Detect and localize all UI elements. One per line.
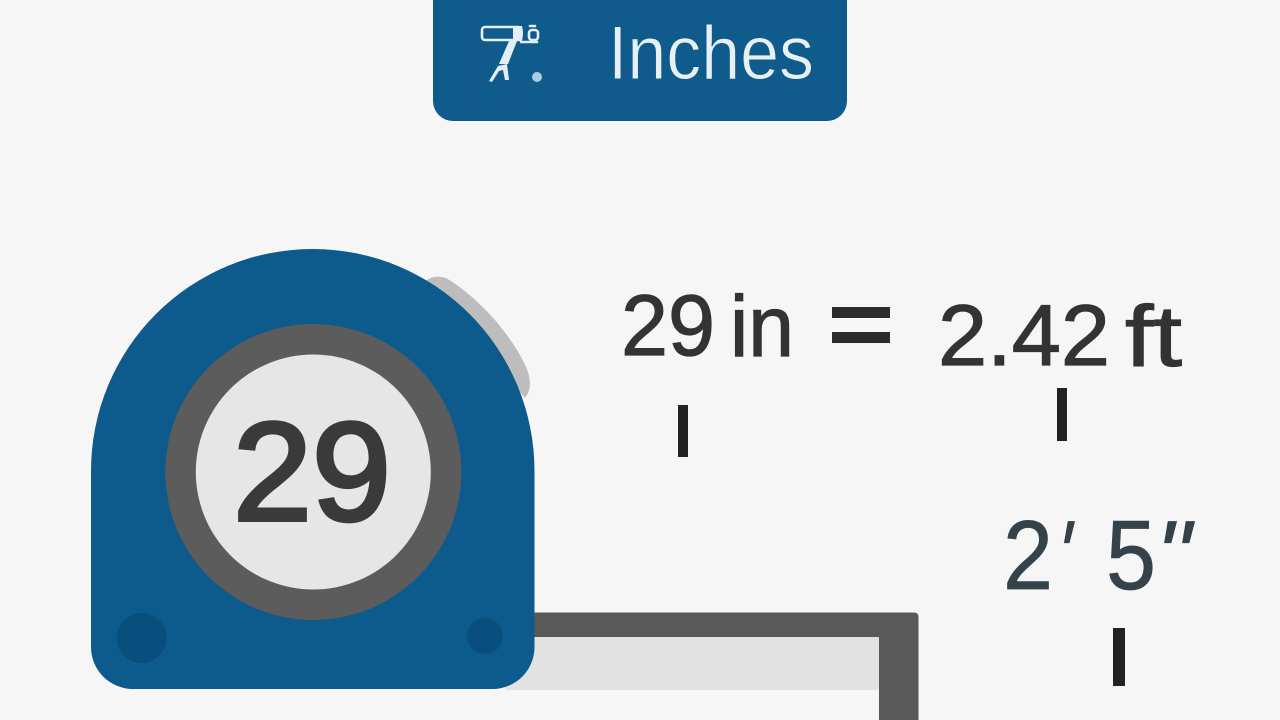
feet value: 2.42 bbox=[938, 288, 1110, 384]
tick under inches bbox=[678, 405, 688, 457]
inches value: 29 bbox=[621, 278, 715, 374]
feet value: ft bbox=[1125, 289, 1182, 385]
banner background bbox=[433, 0, 847, 121]
feet and inches value: ' bbox=[1045, 501, 1083, 611]
tick under feet bbox=[1057, 388, 1067, 441]
header banner bbox=[433, 0, 847, 121]
feet and inches value: 2 bbox=[1003, 500, 1053, 610]
dial face bbox=[196, 354, 431, 590]
extended tape blade bbox=[505, 612, 918, 720]
tape measure illustration bbox=[91, 249, 918, 720]
dial outer ring bbox=[165, 324, 461, 620]
banner title: Inches bbox=[608, 11, 814, 96]
icon dot bbox=[532, 72, 542, 82]
icon: paint roller bbox=[482, 26, 538, 82]
inches value: in bbox=[730, 279, 794, 375]
equals sign bbox=[832, 307, 890, 343]
feet and inches value: 5 bbox=[1106, 500, 1156, 610]
right screw bbox=[467, 618, 503, 654]
grey top tab bbox=[425, 277, 530, 398]
feet and inches value: '' bbox=[1144, 501, 1204, 611]
dial number: 29 bbox=[233, 393, 391, 550]
left screw bbox=[117, 613, 167, 663]
tape case body bbox=[91, 249, 534, 689]
feet and inches value bbox=[1003, 500, 1204, 611]
inches value bbox=[621, 278, 794, 375]
feet value bbox=[938, 288, 1182, 385]
tick under feet and inches bbox=[1113, 628, 1125, 686]
